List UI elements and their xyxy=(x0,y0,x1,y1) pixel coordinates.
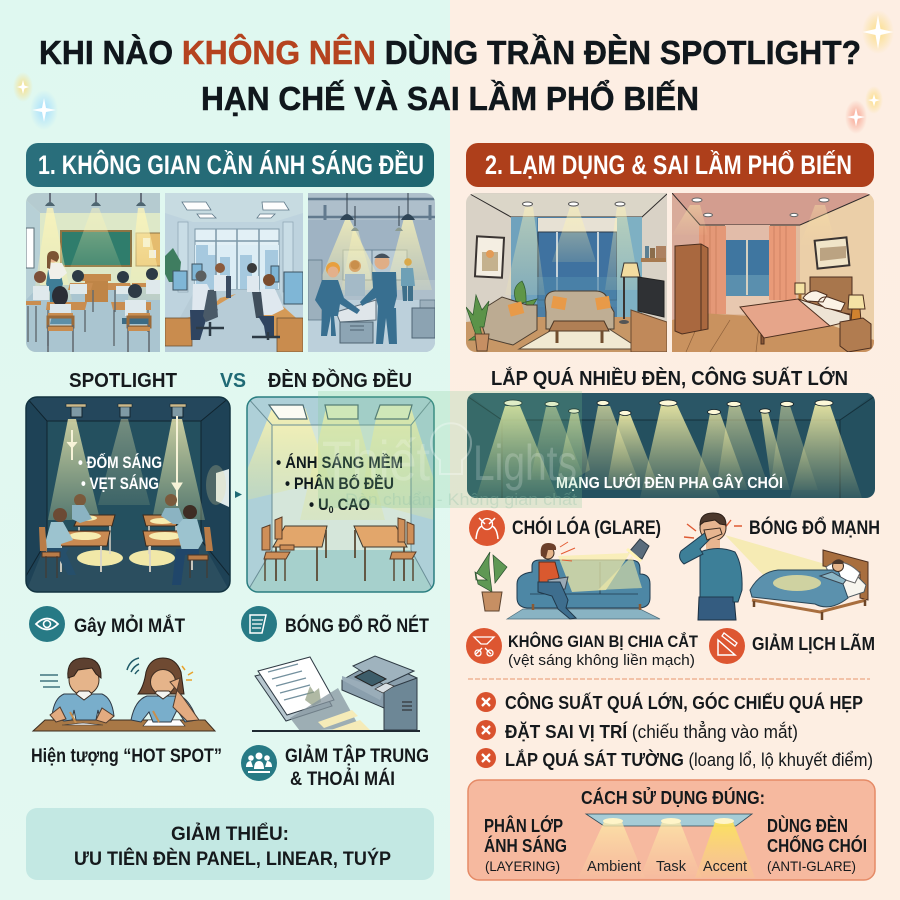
text: không gian bị chia cắt xyxy=(508,632,699,669)
panel: right background xyxy=(450,0,900,900)
label: lắp quá nhiều đèn: LẮP QUÁ NHIỀU ĐÈN, CÔNG SUẤT LỚN xyxy=(491,366,848,390)
text: uniform bullets: • ÁNH SÁNG MỀM xyxy=(276,453,403,472)
text: chói lóa: CHÓI LÓA (GLARE) xyxy=(512,517,661,539)
illustration: open office xyxy=(165,193,303,352)
text: không gian bị chia cắt: (vệt sáng không liền mạch) xyxy=(508,652,695,669)
text: spotlight bullets: • VẸT SÁNG xyxy=(81,474,159,493)
text: anti-glare: CHỐNG CHÓI xyxy=(767,835,867,856)
text: uniform bullets: • U xyxy=(309,496,331,514)
illustration: paper and printer xyxy=(252,656,420,732)
label: VS: VS xyxy=(220,370,246,392)
heading: correct usage: CÁCH SỬ DỤNG ĐÚNG: xyxy=(581,787,765,808)
panel: glare network xyxy=(467,393,875,498)
text: uniform bullets: CAO xyxy=(334,496,370,514)
text: uniform bullets xyxy=(276,453,403,516)
text: layering: (LAYERING) xyxy=(485,858,560,874)
icon: reduced elegance xyxy=(709,628,745,664)
title xyxy=(39,33,861,117)
watermark: Đèn chuẩn - Không gian chất xyxy=(345,490,577,509)
diagram: layered light: Task xyxy=(656,859,687,875)
list: mistakes xyxy=(476,692,873,770)
icon: divided space xyxy=(466,628,502,664)
heading: section 1: 1. KHÔNG GIAN CẦN ÁNH SÁNG ĐỀU xyxy=(38,149,424,180)
illustration: classroom xyxy=(26,193,165,352)
arrow: spotlight to uniform xyxy=(235,491,242,498)
panel: uniform light room xyxy=(247,397,434,592)
text: hiện tượng hot spot: Hiện tượng “HOT SPOT” xyxy=(31,746,222,767)
panel: spotlight room xyxy=(26,397,230,592)
heading: section 2 xyxy=(466,143,874,187)
text: giảm tập trung xyxy=(285,745,429,790)
text: không gian bị chia cắt: KHÔNG GIAN BỊ CHIA CẮT xyxy=(508,632,699,651)
text: gây mỏi mắt: Gây MỎI MẮT xyxy=(74,615,185,637)
illustration: tired students xyxy=(33,658,215,731)
watermark xyxy=(318,391,582,509)
text: network caption: MẠNG LƯỚI ĐÈN PHA GÂY CHÓI xyxy=(556,473,783,492)
diagram: layered light xyxy=(578,814,755,878)
text: bóng đổ mạnh: BÓNG ĐỔ MẠNH xyxy=(749,517,880,539)
panel: correct usage xyxy=(468,780,875,880)
title: HẠN CHẾ VÀ SAI LẦM PHỔ BIẾN xyxy=(201,80,699,117)
illustration: bedroom xyxy=(672,193,874,352)
text: spotlight bullets xyxy=(78,452,162,493)
title: KHI NÀO KHÔNG NÊN DÙNG TRẦN ĐÈN SPOTLIGHT? xyxy=(39,33,861,71)
panel: left background xyxy=(0,0,450,900)
text: layering: ÁNH SÁNG xyxy=(484,835,567,856)
sparkles xyxy=(13,10,894,134)
icon: glare xyxy=(469,510,505,546)
text: giảm tập trung: GIẢM TẬP TRUNG xyxy=(285,745,429,767)
text: uniform bullets: • PHÂN BỐ ĐỀU xyxy=(285,473,394,493)
item: công suất: CÔNG SUẤT QUÁ LỚN, GÓC CHIẾU QUÁ HẸP xyxy=(505,692,863,713)
text: layering xyxy=(484,815,567,874)
item: đặt sai vị trí: ĐẶT SAI VỊ TRÍ (chiếu thẳng vào mắt) xyxy=(505,721,798,742)
heading: section 1 xyxy=(26,143,434,187)
callout: giảm thiểu: GIẢM THIỂU: xyxy=(171,823,289,845)
text: giảm lịch lãm: GIẢM LỊCH LÃM xyxy=(752,633,875,654)
text: anti-glare: DÙNG ĐÈN xyxy=(767,815,848,836)
illustration: living room xyxy=(466,193,667,352)
diagram: layered light: Accent xyxy=(703,859,747,875)
text: anti-glare xyxy=(767,815,867,874)
label: đèn đồng đều: ĐÈN ĐỒNG ĐỀU xyxy=(268,368,412,392)
illustration: factory xyxy=(308,193,435,352)
watermark: Thiết xyxy=(322,429,430,492)
watermark: Lights xyxy=(473,435,577,491)
callout: giảm thiểu xyxy=(26,808,434,880)
text: bóng đổ rõ nét: BÓNG ĐỔ RÕ NÉT xyxy=(285,615,429,637)
text: giảm tập trung: & THOẢI MÁI xyxy=(290,768,395,790)
text: uniform bullets: 0 xyxy=(329,505,334,516)
item: lắp quá sát tường: LẮP QUÁ SÁT TƯỜNG (loang lổ, lộ khuyết điểm) xyxy=(505,749,873,770)
text: anti-glare: (ANTI-GLARE) xyxy=(767,858,856,874)
label: SPOTLIGHT: SPOTLIGHT xyxy=(69,370,177,392)
illustration: man covering eyes and person in bed xyxy=(680,513,868,620)
illustration: woman on sofa with glaring lamp xyxy=(475,539,660,619)
divider xyxy=(468,678,870,680)
icon: document shadow xyxy=(241,606,277,642)
text: spotlight bullets: • ĐỐM SÁNG xyxy=(78,452,162,472)
icon: people group xyxy=(241,745,277,781)
callout: giảm thiểu: ƯU TIÊN ĐÈN PANEL, LINEAR, TUÝP xyxy=(74,848,391,870)
text: layering: PHÂN LỚP xyxy=(484,815,563,836)
diagram: layered light: Ambient xyxy=(587,859,641,875)
icon: eye xyxy=(29,606,65,642)
